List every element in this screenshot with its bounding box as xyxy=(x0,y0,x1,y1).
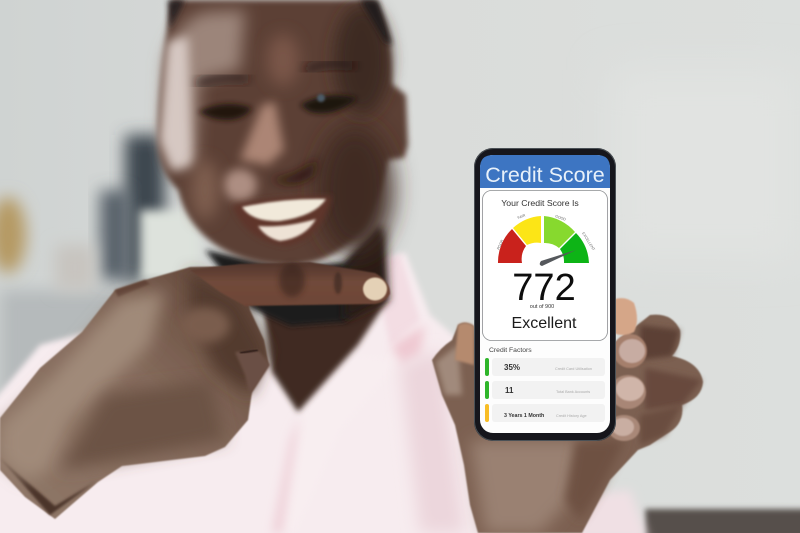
pointing hand xyxy=(0,262,390,519)
neck and beard xyxy=(205,225,390,412)
heading: Your Credit Score Is: Your Credit Score Is xyxy=(501,198,579,208)
gauge labels xyxy=(496,213,596,252)
gauge labels: GOOD xyxy=(555,214,567,222)
factor row: bank accounts: Total Bank Accounts xyxy=(556,390,590,394)
face highlights xyxy=(160,10,299,220)
out of 900: out of 900 xyxy=(530,304,554,310)
gauge labels: POOR xyxy=(496,239,505,250)
head xyxy=(158,0,408,266)
score card xyxy=(482,190,608,340)
rating: Excellent: Excellent xyxy=(512,315,577,332)
factor row: bank accounts xyxy=(485,381,605,399)
score value: 772 xyxy=(512,267,576,309)
factor row: card utilisation: Credit Card Utilisation xyxy=(555,367,592,371)
factor row: card utilisation: 35% xyxy=(504,363,520,372)
factor row: credit history age: 3 Years 1 Month xyxy=(504,413,544,419)
header: Credit Score: Credit Score xyxy=(485,163,605,187)
eyebrows xyxy=(197,77,248,84)
gauge labels: EXCELLENT xyxy=(581,231,596,252)
gauge needle xyxy=(540,250,576,266)
pointing finger xyxy=(190,262,390,306)
credit factors heading: Credit Factors xyxy=(489,347,532,354)
phone screen xyxy=(480,155,610,433)
holding hand xyxy=(432,298,703,533)
factor row: card utilisation xyxy=(485,358,605,376)
header: Credit Score xyxy=(480,155,610,188)
phone xyxy=(474,148,616,441)
icon: fingernail xyxy=(363,278,387,300)
icon: smile teeth xyxy=(232,196,332,246)
gauge labels: FAIR xyxy=(517,213,526,220)
factor row: credit history age xyxy=(485,404,605,422)
factor row: bank accounts: 11 xyxy=(505,386,514,395)
shirt xyxy=(0,252,648,533)
factor row: credit history age: Credit History Age xyxy=(556,414,587,418)
gauge xyxy=(496,213,596,266)
eyes xyxy=(198,104,252,120)
icon: fingertips and nails xyxy=(608,298,647,441)
